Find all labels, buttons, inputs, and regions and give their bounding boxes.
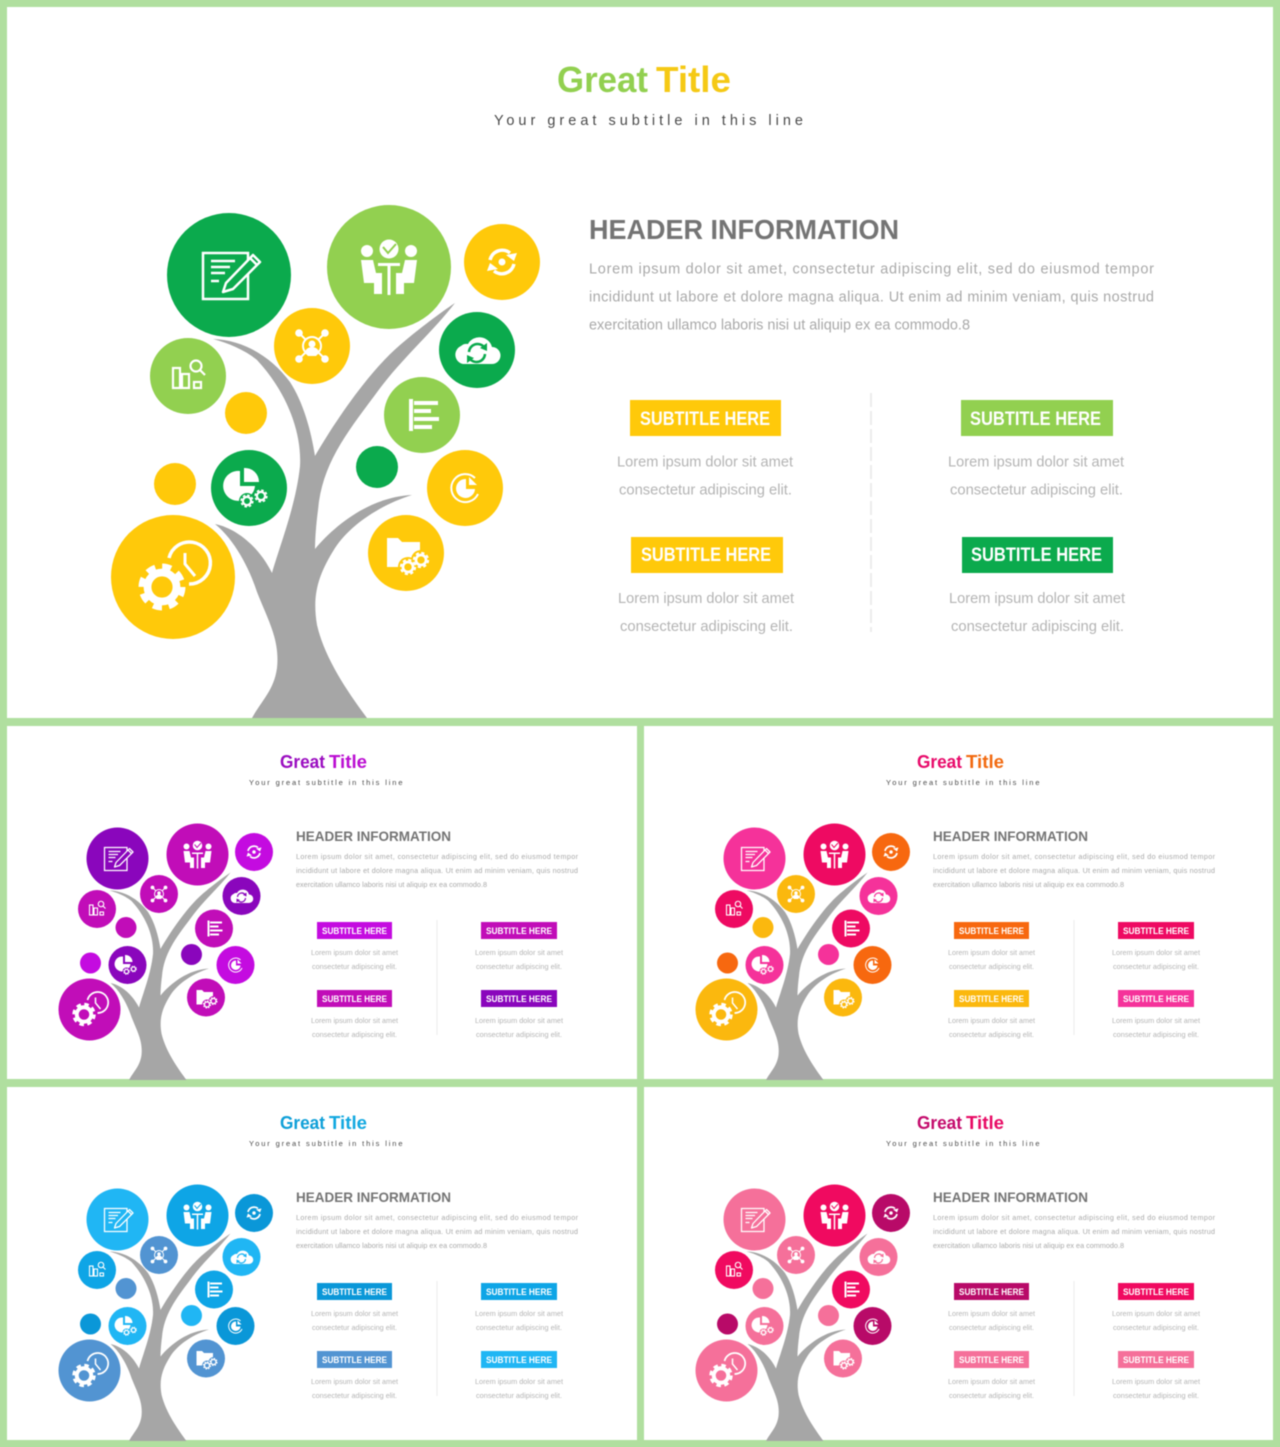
icon circle: refresh [235, 833, 273, 871]
subtitle block 4: SUBTITLE HERE [486, 994, 552, 1005]
subtitle block 3: Lorem ipsum dolor sit amet [311, 1377, 398, 1386]
icon circle: folder gears [824, 978, 862, 1016]
body text: incididunt ut labore et dolore magna aliqua. Ut enim ad minim veniam, quis nostrud [933, 866, 1215, 875]
subtitle block 4: Lorem ipsum dolor sit amet [1112, 1377, 1200, 1386]
body text: exercitation ullamco laboris nisi ut aliquip ex ea commodo.8 [296, 880, 487, 889]
title: Title [329, 1113, 367, 1133]
subtitle block 1 [311, 1283, 398, 1332]
subtitle block 2: Lorem ipsum dolor sit amet [475, 1309, 563, 1318]
icon circle: folder gears [368, 515, 444, 591]
subtitle block 4: SUBTITLE HERE [971, 545, 1102, 566]
subtitle block 2 [475, 922, 563, 971]
header: HEADER INFORMATION [933, 828, 1088, 844]
subtitle block 2 [475, 1283, 563, 1332]
small dot [818, 1305, 839, 1326]
divider [436, 1281, 438, 1396]
subtitle block 3: consectetur adipiscing elit. [949, 1391, 1034, 1400]
subtitle block 2: consectetur adipiscing elit. [1113, 962, 1199, 971]
body text [933, 852, 1216, 889]
icon circle: chart search [150, 338, 226, 414]
icon circle: chart search [715, 1251, 753, 1289]
subtitle block 1: consectetur adipiscing elit. [949, 1323, 1034, 1332]
small dot [356, 446, 398, 488]
subtitle block 4: consectetur adipiscing elit. [1113, 1391, 1199, 1400]
subtitle block 2: consectetur adipiscing elit. [476, 1323, 562, 1332]
subtitle block 4: Lorem ipsum dolor sit amet [949, 591, 1125, 607]
icon circle: gear and clock [696, 1340, 758, 1402]
small dot [181, 1305, 202, 1326]
title [917, 1113, 1004, 1133]
title: Great [557, 59, 648, 100]
icon circle: people [166, 1184, 228, 1246]
icon circle: people [804, 824, 866, 886]
title: Title [966, 1113, 1004, 1133]
panel: purple slide [7, 726, 637, 1080]
subtitle block 1: Lorem ipsum dolor sit amet [948, 948, 1035, 957]
icon circle: cloud sync [860, 1238, 898, 1276]
subtitle block 3 [948, 990, 1035, 1039]
icon circle: pie and gears [211, 450, 287, 526]
header: HEADER INFORMATION [296, 828, 451, 844]
subtitle block 1: consectetur adipiscing elit. [949, 962, 1034, 971]
icon circle: folder gears [187, 978, 225, 1016]
body text: Lorem ipsum dolor sit amet, consectetur adipiscing elit, sed do eiusmod tempor [933, 852, 1216, 861]
icon circle: notepad [167, 213, 291, 337]
small dot [116, 1278, 136, 1299]
subtitle block 2 [1112, 922, 1200, 971]
icon circle: dial [427, 450, 503, 526]
title: Great [280, 752, 325, 772]
small dot [717, 1314, 738, 1334]
icon circle: bar list [832, 1270, 870, 1308]
subtitle block 1: consectetur adipiscing elit. [619, 482, 792, 498]
subtitle block 1 [948, 922, 1035, 971]
subtitle block 3: Lorem ipsum dolor sit amet [311, 1016, 398, 1025]
subtitle block 2: SUBTITLE HERE [1123, 926, 1189, 937]
small dot [154, 463, 196, 505]
icon circle: pie and gears [108, 946, 146, 984]
icon circle: dial [854, 1307, 892, 1345]
body text: exercitation ullamco laboris nisi ut aliquip ex ea commodo.8 [933, 1241, 1124, 1250]
icon circle: people [804, 1184, 866, 1246]
body text [589, 262, 1154, 334]
subtitle block 1: SUBTITLE HERE [959, 1287, 1024, 1298]
subtitle block 1 [948, 1283, 1035, 1332]
small dot [116, 917, 136, 938]
small dot [225, 392, 267, 434]
subtitle block 4 [1112, 990, 1200, 1039]
small dot [752, 1278, 774, 1299]
subtitle block 4: Lorem ipsum dolor sit amet [475, 1016, 563, 1025]
icon circle: network [777, 1236, 815, 1274]
subtitle block 2: SUBTITLE HERE [970, 409, 1101, 430]
subtitle block 2: consectetur adipiscing elit. [950, 482, 1123, 498]
body text [933, 1213, 1216, 1250]
icon circle: gear and clock [696, 978, 758, 1040]
body text: incididunt ut labore et dolore magna aliqua. Ut enim ad minim veniam, quis nostrud [589, 290, 1154, 306]
subtitle block 1: SUBTITLE HERE [322, 926, 387, 937]
icon circle: notepad [724, 1188, 786, 1250]
icon circle: gear and clock [58, 978, 120, 1040]
subtitle block 2: SUBTITLE HERE [1123, 1287, 1189, 1298]
subtitle block 4: SUBTITLE HERE [486, 1355, 552, 1366]
panel: blue slide [7, 1087, 637, 1441]
icon circle: dial [216, 946, 254, 984]
title: Great [280, 1113, 325, 1133]
icon circle: chart search [715, 890, 753, 928]
body text: Lorem ipsum dolor sit amet, consectetur adipiscing elit, sed do eiusmod tempor [589, 262, 1154, 278]
small dot [752, 917, 774, 938]
subtitle block 3: consectetur adipiscing elit. [949, 1030, 1034, 1039]
icon circle: bar list [195, 910, 233, 948]
subtitle block 2: Lorem ipsum dolor sit amet [1112, 1309, 1200, 1318]
subtitle block 3: SUBTITLE HERE [959, 1355, 1024, 1366]
subtitle block 4: consectetur adipiscing elit. [476, 1030, 562, 1039]
icon circle: notepad [86, 1188, 148, 1250]
subtitle block 2 [948, 400, 1124, 498]
subtitle block 3: Lorem ipsum dolor sit amet [948, 1377, 1035, 1386]
subtitle block 4: SUBTITLE HERE [1123, 1355, 1189, 1366]
subtitle block 2: Lorem ipsum dolor sit amet [475, 948, 563, 957]
icon circle: folder gears [187, 1340, 225, 1378]
icon circle: chart search [78, 1251, 116, 1289]
tree diagram [696, 824, 910, 1080]
icon circle: refresh [872, 1194, 910, 1232]
divider [436, 920, 438, 1035]
icon circle: pie and gears [108, 1307, 146, 1345]
subtitle block 1: SUBTITLE HERE [959, 926, 1024, 937]
panel: rose slide [644, 1087, 1273, 1441]
subtitle block 4 [949, 537, 1125, 635]
body text: incididunt ut labore et dolore magna aliqua. Ut enim ad minim veniam, quis nostrud [296, 1227, 578, 1236]
subtitle block 1: SUBTITLE HERE [322, 1287, 387, 1298]
body text: exercitation ullamco laboris nisi ut aliquip ex ea commodo.8 [933, 880, 1124, 889]
subtitle block 1 [617, 400, 793, 498]
subtitle block 4 [475, 990, 563, 1039]
subtitle block 3: SUBTITLE HERE [959, 994, 1024, 1005]
subtitle block 3 [311, 1351, 398, 1400]
subtitle block 3: SUBTITLE HERE [322, 994, 387, 1005]
icon circle: refresh [235, 1194, 273, 1232]
subtitle block 1: Lorem ipsum dolor sit amet [617, 454, 793, 470]
body text: Lorem ipsum dolor sit amet, consectetur adipiscing elit, sed do eiusmod tempor [933, 1213, 1216, 1222]
subtitle block 3 [618, 537, 794, 635]
title: Title [329, 752, 367, 772]
icon circle: dial [216, 1307, 254, 1345]
icon circle: chart search [78, 890, 116, 928]
title [280, 1113, 367, 1133]
header: HEADER INFORMATION [296, 1189, 451, 1205]
subtitle block 4: consectetur adipiscing elit. [476, 1391, 562, 1400]
subtitle: Your great subtitle in this line [249, 778, 402, 787]
header: HEADER INFORMATION [589, 214, 899, 245]
tree diagram [58, 1184, 273, 1441]
subtitle block 2: SUBTITLE HERE [486, 926, 552, 937]
icon circle: gear and clock [111, 515, 235, 639]
body text: Lorem ipsum dolor sit amet, consectetur adipiscing elit, sed do eiusmod tempor [296, 852, 579, 861]
subtitle block 3: consectetur adipiscing elit. [620, 619, 793, 635]
subtitle: Your great subtitle in this line [886, 778, 1040, 787]
subtitle block 4: consectetur adipiscing elit. [951, 619, 1124, 635]
subtitle block 1 [311, 922, 398, 971]
subtitle block 1: Lorem ipsum dolor sit amet [311, 948, 398, 957]
icon circle: folder gears [824, 1340, 862, 1378]
subtitle block 3: SUBTITLE HERE [322, 1355, 387, 1366]
subtitle: Your great subtitle in this line [886, 1139, 1040, 1148]
icon circle: bar list [195, 1270, 233, 1308]
tree diagram [111, 205, 540, 718]
subtitle block 1: consectetur adipiscing elit. [312, 1323, 397, 1332]
subtitle block 4 [1112, 1351, 1200, 1400]
panel: pink and orange slide [644, 726, 1273, 1080]
subtitle block 3 [948, 1351, 1035, 1400]
title [557, 59, 731, 100]
title [917, 752, 1004, 772]
body text [296, 1213, 579, 1250]
divider [870, 393, 872, 632]
subtitle block 1: Lorem ipsum dolor sit amet [311, 1309, 398, 1318]
icon circle: cloud sync [222, 877, 260, 915]
divider [1073, 1281, 1075, 1396]
small dot [717, 952, 738, 974]
tree diagram [58, 824, 273, 1080]
subtitle block 4: Lorem ipsum dolor sit amet [1112, 1016, 1200, 1025]
subtitle block 1: SUBTITLE HERE [640, 409, 770, 430]
icon circle: network [777, 875, 815, 913]
title: Great [917, 1113, 962, 1133]
icon circle: people [327, 205, 451, 329]
subtitle block 3: consectetur adipiscing elit. [312, 1391, 397, 1400]
icon circle: pie and gears [746, 1307, 784, 1345]
body text [296, 852, 579, 889]
body text: incididunt ut labore et dolore magna aliqua. Ut enim ad minim veniam, quis nostrud [296, 866, 578, 875]
subtitle block 2: consectetur adipiscing elit. [1113, 1323, 1199, 1332]
icon circle: network [140, 875, 178, 913]
subtitle block 1: consectetur adipiscing elit. [312, 962, 397, 971]
icon circle: bar list [384, 377, 460, 453]
icon circle: cloud sync [222, 1238, 260, 1276]
icon circle: dial [854, 946, 892, 984]
body text: incididunt ut labore et dolore magna aliqua. Ut enim ad minim veniam, quis nostrud [933, 1227, 1215, 1236]
subtitle block 3: Lorem ipsum dolor sit amet [948, 1016, 1035, 1025]
body text: Lorem ipsum dolor sit amet, consectetur adipiscing elit, sed do eiusmod tempor [296, 1213, 579, 1222]
icon circle: gear and clock [58, 1340, 120, 1402]
subtitle block 4 [475, 1351, 563, 1400]
panel: green main slide [7, 7, 1273, 718]
subtitle block 4: Lorem ipsum dolor sit amet [475, 1377, 563, 1386]
title: Great [917, 752, 962, 772]
title: Title [656, 59, 731, 100]
subtitle block 3 [311, 990, 398, 1039]
icon circle: people [166, 824, 228, 886]
subtitle block 3: SUBTITLE HERE [641, 545, 771, 566]
icon circle: pie and gears [746, 946, 784, 984]
icon circle: notepad [724, 828, 786, 890]
subtitle block 1: Lorem ipsum dolor sit amet [948, 1309, 1035, 1318]
subtitle: Your great subtitle in this line [494, 113, 803, 129]
icon circle: cloud sync [439, 312, 515, 388]
divider [1073, 920, 1075, 1035]
small dot [80, 952, 101, 974]
icon circle: refresh [464, 224, 540, 300]
subtitle block 4: SUBTITLE HERE [1123, 994, 1189, 1005]
small dot [181, 944, 202, 965]
tree diagram [696, 1184, 910, 1441]
icon circle: notepad [86, 828, 148, 890]
subtitle: Your great subtitle in this line [249, 1139, 402, 1148]
subtitle block 2: Lorem ipsum dolor sit amet [1112, 948, 1200, 957]
small dot [80, 1314, 101, 1334]
body text: exercitation ullamco laboris nisi ut aliquip ex ea commodo.8 [589, 318, 970, 334]
subtitle block 2: consectetur adipiscing elit. [476, 962, 562, 971]
body text: exercitation ullamco laboris nisi ut aliquip ex ea commodo.8 [296, 1241, 487, 1250]
icon circle: network [274, 308, 350, 384]
subtitle block 2: Lorem ipsum dolor sit amet [948, 454, 1124, 470]
header: HEADER INFORMATION [933, 1189, 1088, 1205]
icon circle: network [140, 1236, 178, 1274]
icon circle: bar list [832, 910, 870, 948]
subtitle block 3: Lorem ipsum dolor sit amet [618, 591, 794, 607]
subtitle block 2 [1112, 1283, 1200, 1332]
subtitle block 2: SUBTITLE HERE [486, 1287, 552, 1298]
title: Title [966, 752, 1004, 772]
subtitle block 4: consectetur adipiscing elit. [1113, 1030, 1199, 1039]
icon circle: cloud sync [860, 877, 898, 915]
small dot [818, 944, 839, 965]
title [280, 752, 367, 772]
icon circle: refresh [872, 833, 910, 871]
subtitle block 3: consectetur adipiscing elit. [312, 1030, 397, 1039]
